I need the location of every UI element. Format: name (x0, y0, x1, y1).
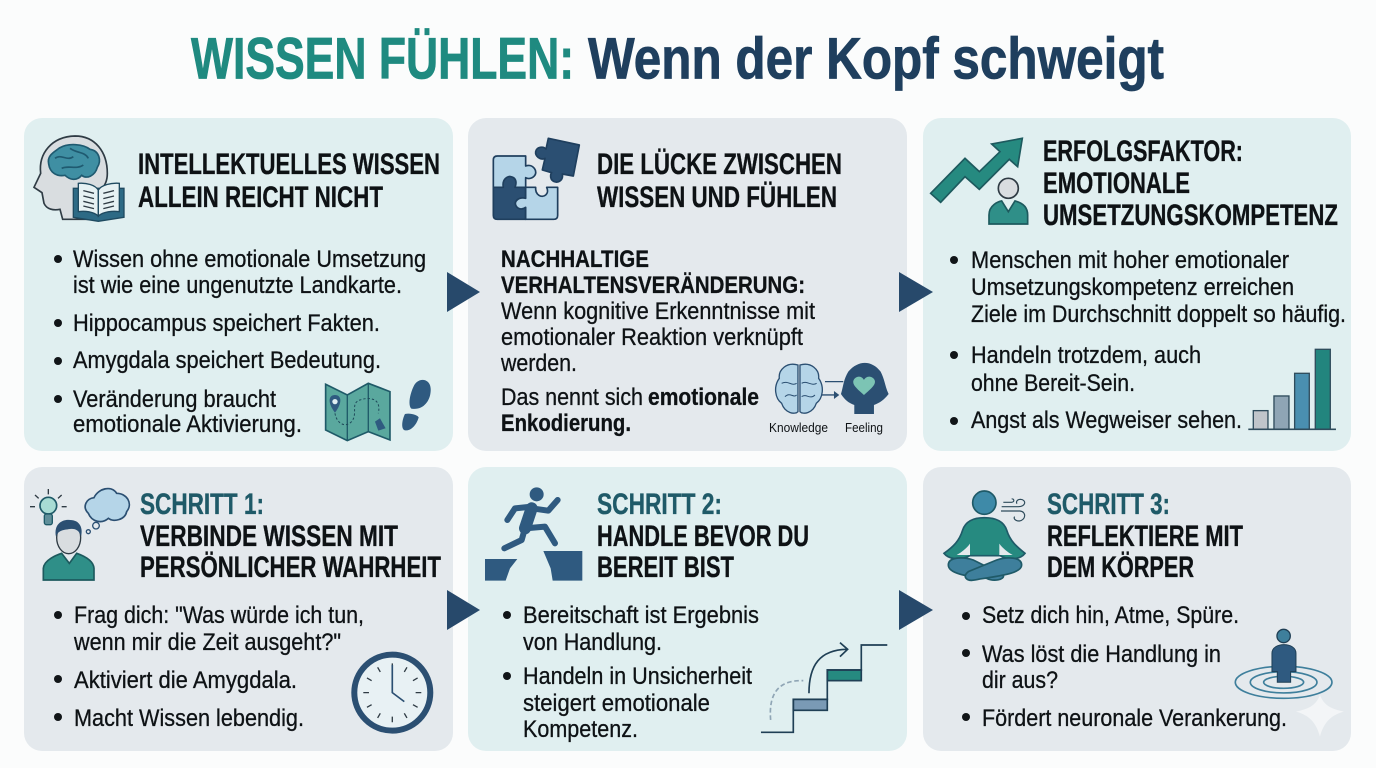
icon: puzzle (493, 138, 579, 219)
icon: rising arrow with person (931, 138, 1028, 224)
text block: Enkodierung. (501, 410, 631, 437)
icon: person standing in ripples (1235, 629, 1332, 698)
text block: VERHALTENSVERÄNDERUNG: (501, 272, 805, 299)
text block: emotionale (648, 384, 759, 411)
icon: footprint (402, 380, 431, 430)
bullet list (54, 602, 364, 732)
icon: runner jumping a gap (485, 487, 582, 581)
bullet list: steigert emotionale (523, 690, 710, 717)
title: WISSEN FÜHLEN: (191, 26, 574, 92)
bullet list: Veränderung braucht (73, 386, 276, 413)
bullet list: Was löst die Handlung in (982, 641, 1221, 668)
bullet list: Aktiviert die Amygdala. (74, 667, 297, 694)
arrow: bottom middle to right (899, 590, 933, 630)
bullet list: Macht Wissen lebendig. (74, 705, 304, 732)
heading: DEM KÖRPER (1047, 551, 1194, 584)
bullet list: dir aus? (982, 667, 1058, 694)
heading (1043, 135, 1338, 232)
bullet list: Bereitschaft ist Ergebnis (523, 602, 759, 629)
title (191, 26, 1164, 92)
heading: ERFOLGSFAKTOR: (1043, 135, 1243, 168)
icon: sparkle (1296, 695, 1344, 737)
icon: stairs with arrow (761, 643, 887, 732)
panel: Erfolgsfaktor (923, 118, 1351, 451)
heading: VERBINDE WISSEN MIT (140, 520, 398, 553)
text block: emotionaler Reaktion verknüpft (501, 324, 803, 351)
icon: thinking person with bulb (30, 489, 129, 580)
heading (140, 488, 441, 584)
bullet list: Handeln trotzdem, auch (971, 342, 1201, 369)
bullet list (503, 602, 759, 743)
heading: SCHRITT 1: (140, 488, 264, 521)
arrow: bottom left to middle (447, 590, 480, 630)
panel: Schritt 1 (24, 467, 453, 751)
text block: Das nennt sich (501, 384, 643, 411)
bullet list: Hippocampus speichert Fakten. (73, 310, 380, 337)
icon: head with brain and book (34, 136, 124, 221)
arrow: top left to middle (447, 272, 480, 312)
bullet list: Fördert neuronale Verankerung. (982, 705, 1287, 732)
heading: INTELLEKTUELLES WISSEN (138, 148, 440, 181)
bar chart (1248, 349, 1336, 429)
bullet list (950, 247, 1346, 434)
heading: WISSEN UND FÜHLEN (597, 181, 837, 214)
heading: ALLEIN REICHT NICHT (138, 181, 383, 214)
icon: knowledge to feeling (769, 363, 889, 435)
panel: Lücke zwischen Wissen und Fühlen (468, 118, 907, 451)
bullet list: ohne Bereit-Sein. (971, 370, 1135, 397)
bullet list: Umsetzungskompetenz erreichen (971, 274, 1294, 301)
arrow: top middle to right (899, 272, 933, 312)
bullet list: Kompetenz. (523, 716, 638, 743)
bullet list: von Handlung. (523, 629, 662, 656)
text block: NACHHALTIGE (501, 246, 649, 273)
heading: HANDLE BEVOR DU (597, 520, 809, 553)
heading: REFLEKTIERE MIT (1047, 520, 1243, 553)
bullet list: wenn mir die Zeit ausgeht?" (73, 629, 341, 656)
bullet list: Angst als Wegweiser sehen. (971, 407, 1242, 434)
heading (597, 148, 842, 214)
text block: Wenn kognitive Erkenntnisse mit (501, 298, 815, 325)
bullet list: Menschen mit hoher emotionaler (971, 247, 1289, 274)
heading (138, 148, 440, 214)
bullet list: Handeln in Unsicherheit (523, 663, 752, 690)
bullet list: Amygdala speichert Bedeutung. (73, 347, 381, 374)
icon: map (326, 383, 390, 441)
heading: SCHRITT 3: (1047, 488, 1170, 521)
bullet list: Frag dich: "Was würde ich tun, (74, 602, 364, 629)
heading: PERSÖNLICHER WAHRHEIT (140, 551, 441, 584)
panel: Schritt 2 (468, 467, 907, 751)
heading: BEREIT BIST (597, 551, 734, 584)
panel: Schritt 3 (923, 467, 1351, 751)
bullet list: Wissen ohne emotionale Umsetzung (73, 246, 426, 273)
bullet list (962, 602, 1287, 732)
heading: EMOTIONALE (1043, 167, 1190, 200)
heading: DIE LÜCKE ZWISCHEN (597, 148, 842, 181)
heading (597, 488, 809, 584)
heading: SCHRITT 2: (597, 488, 722, 521)
bullet list: ist wie eine ungenutzte Landkarte. (73, 272, 402, 299)
heading (1047, 488, 1243, 584)
panel: intellektuelles Wissen (24, 118, 453, 451)
text block (500, 246, 815, 437)
text block: werden. (500, 350, 577, 377)
icon: knowledge to feeling: Knowledge (769, 420, 828, 435)
icon: meditating person (944, 491, 1025, 580)
bullet list: Setz dich hin, Atme, Spüre. (982, 602, 1239, 629)
bullet list: emotionale Aktivierung. (73, 411, 302, 438)
title: Wenn der Kopf schweigt (588, 26, 1164, 92)
icon: clock (354, 655, 430, 731)
icon: knowledge to feeling: Feeling (845, 420, 883, 435)
bullet list (54, 246, 426, 438)
